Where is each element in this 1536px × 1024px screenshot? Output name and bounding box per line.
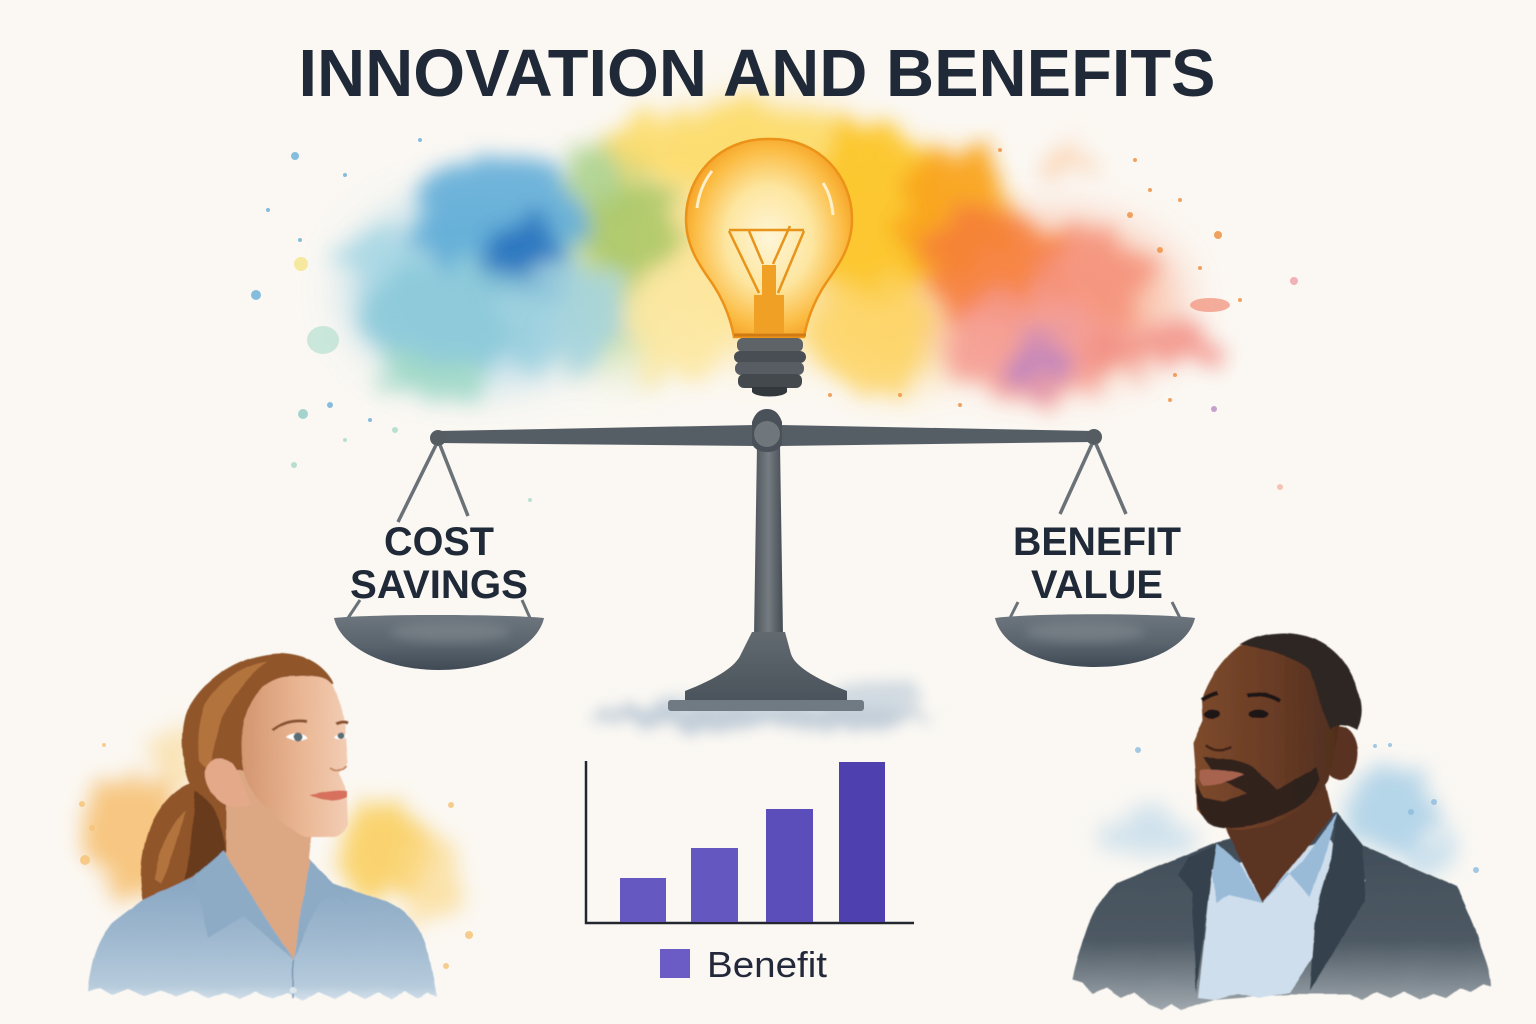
left pan strings [398,445,468,522]
watercolor splash behind bulb [251,105,1298,502]
shirt collar [1212,813,1337,903]
legend [660,944,827,985]
scale base shadow [585,682,935,729]
facial features [1202,693,1280,750]
lips [1199,769,1244,785]
illustration: woman [79,653,473,1001]
label: benefit value: BENEFIT [1013,520,1181,564]
label: cost savings: COST [384,520,494,564]
ear [205,758,251,807]
neck [208,770,332,960]
bars [620,762,885,922]
face [1193,642,1342,830]
illustration: man [1072,633,1491,1010]
hair [1240,633,1362,730]
shirt collar [195,851,351,960]
lapel shadow [1178,813,1365,993]
label: cost savings: SAVINGS [350,563,528,607]
scale post and base [668,445,864,711]
bulb screw base [734,338,806,396]
bar chart [586,761,914,985]
title: INNOVATION AND BENEFITS [298,36,1216,111]
left pan [334,615,544,670]
icon: light bulb [686,139,852,396]
shirt [1198,840,1365,1000]
legend: Benefit [707,944,827,985]
beard [1197,757,1320,828]
facial features [273,720,348,801]
neck [1222,770,1333,903]
ear [1322,726,1358,780]
face [241,676,348,837]
right pan strings [1060,444,1126,514]
balance scale [334,409,1195,729]
right pan [995,614,1195,667]
hair [141,653,333,900]
shirt [88,851,437,1001]
label: benefit value: VALUE [1031,563,1163,607]
scale beam [438,425,1094,446]
jacket [1072,812,1491,1010]
